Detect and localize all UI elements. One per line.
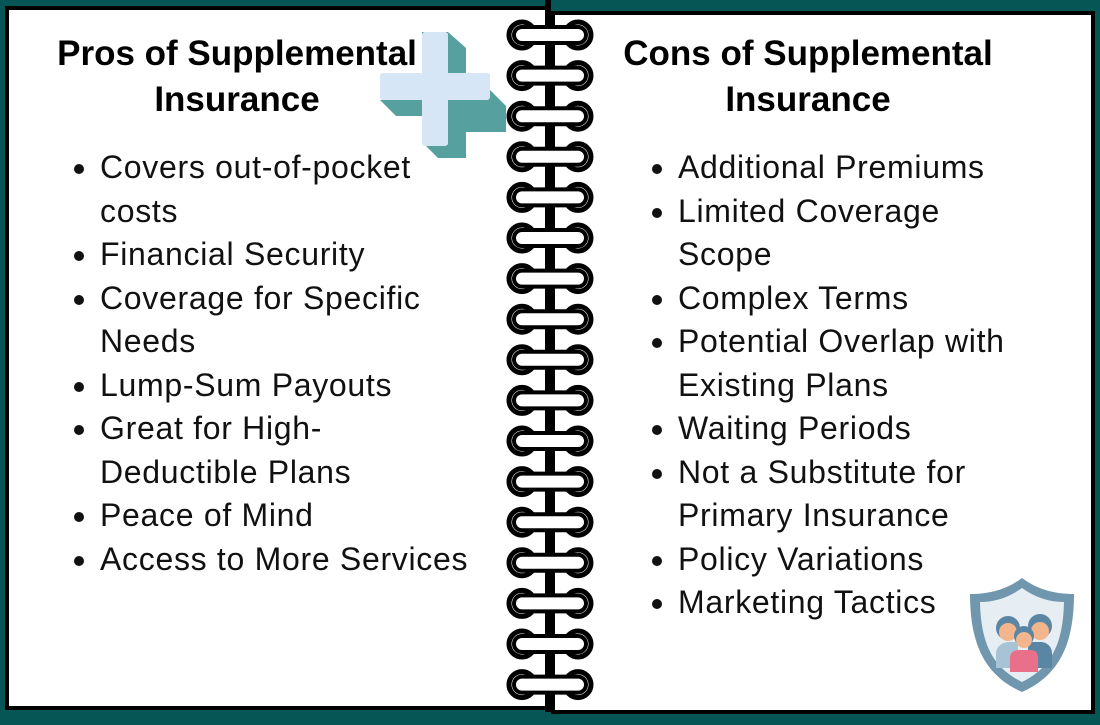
list: cons: Not a Substitute for: [678, 454, 966, 490]
title: cons: Insurance: [725, 80, 891, 119]
list: pros: Access to More Services: [100, 540, 468, 576]
icon: family shield: [970, 578, 1074, 692]
list: cons: Additional Premiums: [678, 149, 985, 185]
list: cons: Existing Plans: [678, 366, 889, 402]
list: cons: Primary Insurance: [678, 497, 950, 533]
list: pros: Great for High-: [100, 410, 322, 446]
list: cons: Complex Terms: [678, 280, 909, 316]
list: pros: Coverage for Specific: [100, 280, 421, 316]
list: pros: Peace of Mind: [100, 497, 314, 533]
list: pros: costs: [100, 192, 178, 228]
title: cons: Cons of Supplemental: [623, 34, 993, 73]
title: pros: Pros of Supplemental: [57, 34, 417, 73]
title: pros: Insurance: [154, 80, 320, 119]
list: pros: [74, 149, 468, 576]
list: cons: Policy Variations: [678, 540, 924, 576]
list: cons: [652, 149, 1005, 620]
right page: [551, 11, 1095, 714]
icon: plus: [380, 32, 506, 158]
list: pros: Needs: [100, 323, 196, 359]
list: pros: Covers out-of-pocket: [100, 149, 411, 185]
list: pros: Financial Security: [100, 236, 365, 272]
left page: [5, 6, 551, 710]
list: pros: Deductible Plans: [100, 454, 351, 490]
list: cons: Potential Overlap with: [678, 323, 1005, 359]
title: cons: [623, 34, 993, 119]
list: cons: Scope: [678, 236, 772, 272]
list: cons: Marketing Tactics: [678, 584, 937, 620]
spiral binding: [506, 0, 594, 712]
title: pros: [57, 34, 417, 119]
list: pros: Lump-Sum Payouts: [100, 366, 392, 402]
list: cons: Waiting Periods: [678, 410, 911, 446]
list: cons: Limited Coverage: [678, 192, 940, 228]
